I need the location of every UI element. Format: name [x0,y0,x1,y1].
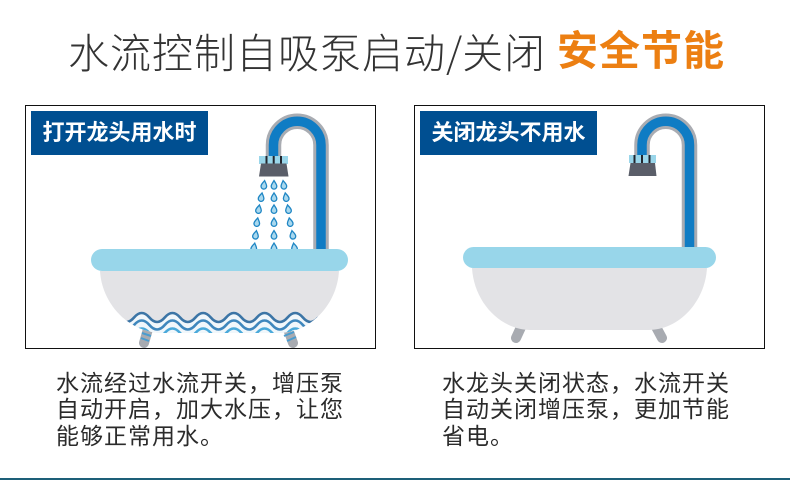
icon: tub body with water waves [100,271,339,333]
icon: faucet head [259,156,288,176]
icon: tub rim [91,249,348,271]
icon: faucet pipe [274,121,321,250]
text block: faucet off description: 省电。 [442,423,514,449]
icon: right foot [284,329,296,343]
text block: faucet on description [56,370,344,449]
text block: faucet on description: 水流经过水流开关，增压泵 [56,370,344,396]
label: faucet on [31,111,208,155]
label: faucet off [420,111,597,155]
label: faucet off: 关闭龙头不用水 [431,120,586,145]
label: faucet on: 打开龙头用水时 [42,120,196,145]
text block: faucet off description: 自动关闭增压泵，更加节能 [442,396,730,422]
icon: tub body [472,268,707,330]
title: 水流控制自吸泵启动/关闭 [68,20,546,80]
bottom rule [0,478,790,480]
text block: faucet on description: 能够正常用水。 [56,423,224,449]
icon: tub rim [463,247,716,268]
icon: water drops [251,180,298,252]
text block: faucet off description [442,370,730,449]
panel: faucet off [414,105,765,349]
icon: feet [516,325,662,338]
text block: faucet off description: 水龙头关闭状态，水流开关 [442,370,730,396]
icon: faucet pipe [642,121,690,248]
title: 安全节能 [557,28,725,74]
icon: left foot [141,329,151,343]
text block: faucet on description: 自动开启，加大水压，让您 [56,396,344,422]
panel: faucet on [25,105,376,349]
icon: faucet head [628,155,656,176]
